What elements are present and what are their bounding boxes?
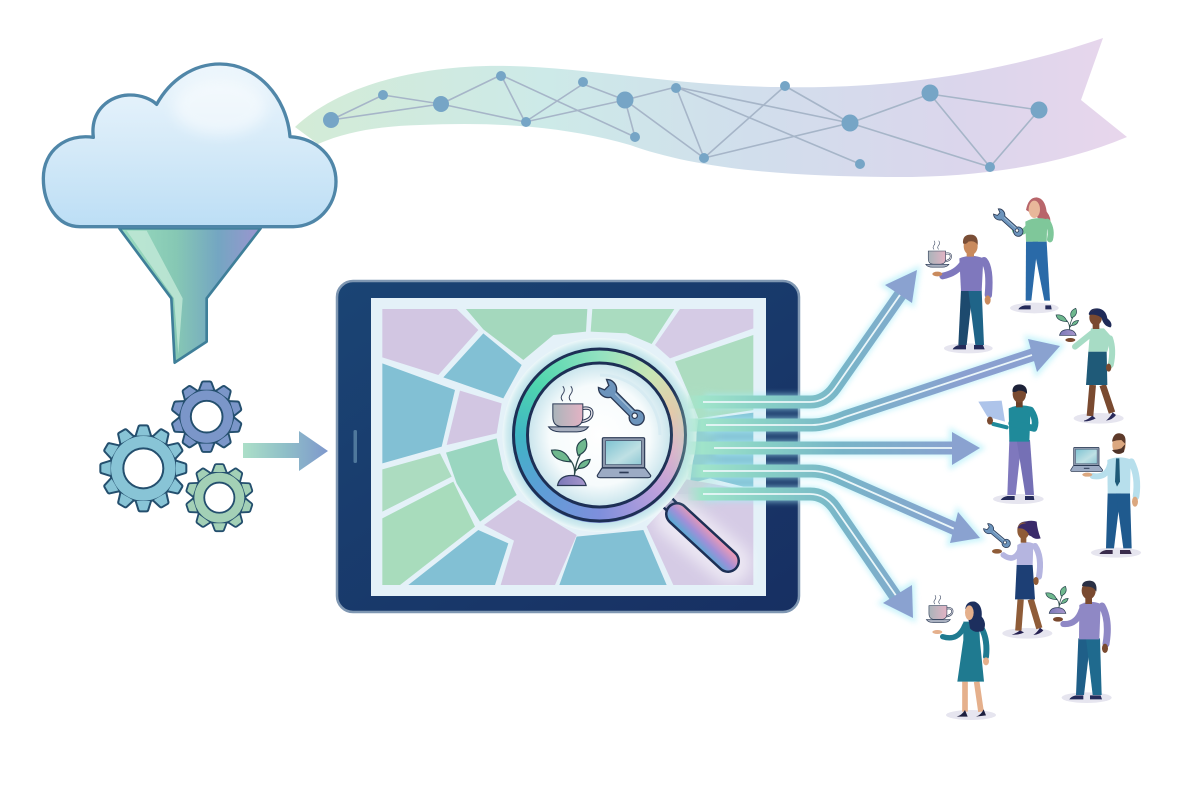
icon: laptop [597, 438, 651, 478]
panel: magnifying glass [502, 338, 730, 563]
panel: output arrows [688, 270, 1060, 618]
arrow 3 to man with tablet [688, 432, 980, 465]
person: man with coffee [926, 235, 993, 353]
network edges [331, 75, 1039, 167]
person: man with plant lower [1046, 581, 1112, 703]
arrow 2 to woman with plant [688, 339, 1060, 425]
lens [528, 363, 672, 507]
tablet body [337, 281, 799, 612]
gear: purple [171, 381, 243, 452]
arrow glow [705, 270, 1060, 618]
gear: blue large [100, 425, 186, 511]
ring outline [514, 349, 686, 521]
arrow 1 up to man with coffee [688, 270, 917, 402]
rainbow ring [512, 348, 687, 523]
icon: coffee cup [549, 386, 592, 432]
ribbon banner [295, 38, 1127, 177]
network nodes [323, 71, 1048, 172]
person: woman with plant [1056, 308, 1124, 424]
gear: green [185, 464, 254, 531]
mosaic map [382, 309, 753, 585]
tablet home button [354, 430, 357, 463]
lens highlight [600, 375, 660, 435]
person: man with laptop [1071, 433, 1141, 558]
panel: data ribbon network [295, 38, 1127, 177]
lens output glow [678, 394, 714, 502]
panel: tablet [337, 281, 799, 612]
person: woman with wrench [992, 197, 1059, 313]
funnel [119, 228, 261, 363]
arrow: gears to tablet [243, 431, 328, 471]
icon: plant [552, 439, 590, 485]
glass handle [662, 497, 730, 563]
tablet screen [371, 298, 766, 596]
glass halo [502, 338, 696, 532]
arrow 5 to woman with coffee [688, 494, 913, 618]
person: woman with coffee lower [926, 595, 996, 720]
arrow 4 to woman with wrench [688, 471, 980, 543]
person: man with tablet [978, 384, 1044, 504]
cloud [43, 64, 336, 227]
person: woman with wrench lower [982, 521, 1052, 639]
panel: cloud funnel and gears [43, 64, 336, 531]
icon: wrench [596, 377, 648, 429]
